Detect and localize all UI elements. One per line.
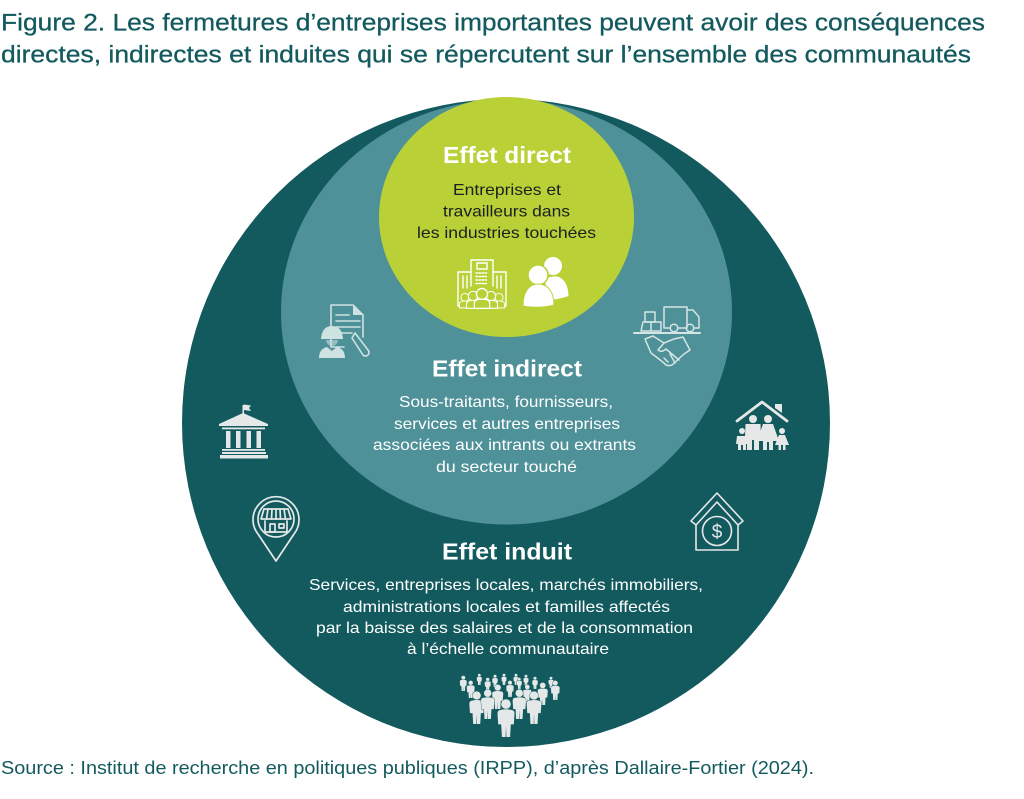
text block: effet induit: Services, entreprises locales, marchés immobiliers, — [309, 577, 703, 594]
heading: effet direct: Effet direct — [443, 142, 571, 168]
heading: effet indirect: Effet indirect — [432, 356, 582, 382]
icon: worker with document — [319, 305, 369, 358]
text block: effet indirect — [373, 394, 636, 476]
icon: crowd of people — [460, 674, 560, 737]
text block: effet induit: administrations locales et familles affectés — [343, 599, 670, 616]
icon: truck, boxes and handshake — [634, 307, 700, 366]
text block: effet indirect: Sous-traitants, fournisseurs, — [399, 394, 613, 411]
panel: effet induit circle — [182, 99, 830, 747]
icon: store location pin — [253, 497, 299, 561]
text block: effet indirect: associées aux intrants ou extrants — [373, 437, 636, 454]
text block: effet indirect: du secteur touché — [436, 459, 577, 476]
icon: two people — [523, 257, 568, 307]
icon: house with dollar: $ — [712, 522, 723, 543]
title: Figure 2. Les fermetures d’entreprises importantes peuvent avoir des conséquences — [1, 10, 985, 36]
icon: house with dollar — [691, 493, 743, 550]
panel: effet indirect circle — [281, 100, 732, 524]
text block: effet induit: à l’échelle communautaire — [407, 641, 609, 658]
text block: effet direct: travailleurs dans — [443, 204, 570, 220]
text block: effet direct: Entreprises et — [453, 182, 562, 199]
text block: effet induit — [309, 577, 703, 658]
title — [1, 10, 985, 68]
source: Source : Institut de recherche en politiques publiques (IRPP), d’après Dallaire-Fortier (2024). — [1, 758, 814, 778]
text block: effet induit: par la baisse des salaires et de la consommation — [316, 620, 693, 637]
text block: effet direct — [417, 182, 596, 242]
icon: family under a roof — [736, 402, 789, 450]
text block: effet direct: les industries touchées — [417, 225, 596, 242]
panel: effet direct circle — [379, 97, 634, 337]
heading: effet induit: Effet induit — [442, 538, 572, 564]
icon: building with workers — [458, 260, 506, 308]
text block: effet indirect: services et autres entreprises — [394, 416, 620, 433]
title: directes, indirectes et induites qui se répercutent sur l’ensemble des communautés — [1, 42, 971, 68]
icon: government building — [219, 404, 268, 458]
